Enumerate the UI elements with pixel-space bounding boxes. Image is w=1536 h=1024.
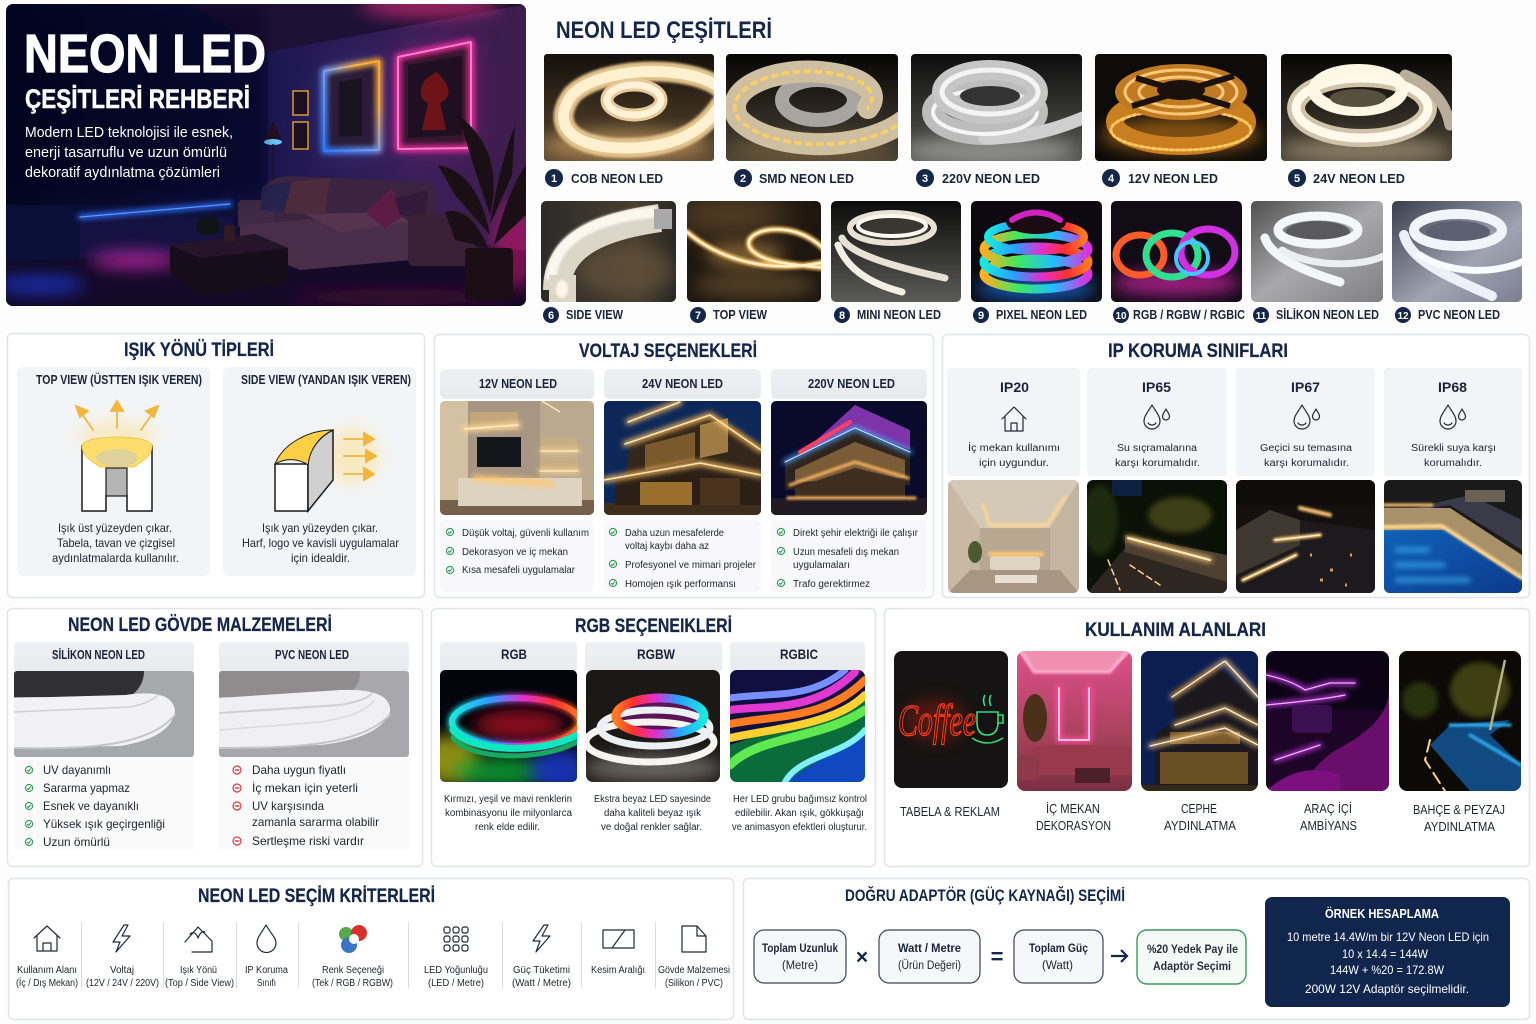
card: IP67: karşı korumalıdır. bbox=[1264, 458, 1349, 469]
hero description: Modern LED teknolojisi ile esnek, bbox=[25, 125, 233, 141]
photo: facade night bbox=[1141, 651, 1258, 791]
photo: facade with rgb neon bbox=[771, 401, 927, 515]
box: total length: Toplam Uzunluk bbox=[762, 943, 839, 955]
labels: row two: MINI NEON LED bbox=[857, 308, 941, 322]
card: top view: TOP VIEW (ÜSTTEN IŞIK VEREN) bbox=[36, 372, 202, 387]
description: rgb bbox=[444, 794, 572, 833]
criterion: usage area: (İç / Dış Mekan) bbox=[16, 976, 78, 989]
operator: times: × bbox=[856, 946, 868, 969]
labels: row two: PVC NEON LED bbox=[1418, 308, 1500, 322]
hero description bbox=[25, 125, 233, 181]
panel: selection criteria bbox=[8, 878, 734, 1020]
box: watt per metre bbox=[879, 930, 980, 983]
card: IP20 bbox=[947, 368, 1080, 476]
labels: row two bbox=[543, 307, 1500, 323]
section: neon led types bbox=[540, 17, 1530, 323]
criterion: voltage bbox=[86, 925, 159, 989]
list: 220V: Trafo gerektirmez bbox=[793, 579, 870, 590]
box: safety margin bbox=[1137, 930, 1246, 984]
coffee table bbox=[170, 217, 288, 297]
photo: SMD neon led bbox=[726, 54, 905, 162]
labels: row two: RGB / RGBW / RGBIC bbox=[1133, 308, 1245, 322]
criterion: ip class: IP Koruma bbox=[245, 965, 288, 976]
arrow bbox=[1111, 950, 1127, 962]
hero subtitle: ÇEŞİTLERİ REHBERİ bbox=[25, 84, 250, 114]
photo: 220V neon led bbox=[911, 54, 1082, 161]
photo: pink interior bbox=[1017, 651, 1132, 791]
card: side view bbox=[223, 367, 416, 576]
icon: side emitting profile bbox=[275, 430, 333, 511]
column headers bbox=[440, 369, 927, 399]
criterion: color: (Tek / RGB / RGBW) bbox=[312, 978, 393, 989]
panel: light direction types bbox=[8, 334, 424, 598]
photo: top view bbox=[687, 201, 821, 302]
photo: rgbw strip bbox=[583, 670, 723, 782]
card: IP20: için uygundur. bbox=[979, 458, 1049, 469]
description: için idealdir. bbox=[291, 551, 350, 565]
labels: row two: TOP VIEW bbox=[713, 308, 767, 322]
criterion: body material: Gövde Malzemesi bbox=[658, 965, 730, 976]
list: pvc cons: Sertleşme riski vardır bbox=[252, 834, 364, 848]
photo: rgb strip bbox=[440, 670, 577, 782]
list: 220V: uygulamaları bbox=[793, 560, 850, 571]
description: rgb: renk elde edilir. bbox=[475, 822, 540, 833]
heading: RGB SEÇENEIKLERİ bbox=[575, 616, 732, 637]
card: IP68: IP68 bbox=[1438, 379, 1467, 395]
card: IP67: IP67 bbox=[1291, 379, 1320, 395]
photo: stepping water bbox=[1236, 480, 1375, 593]
list: 24V: Daha uzun mesafelerde bbox=[625, 528, 724, 539]
card: IP65: IP65 bbox=[1142, 379, 1171, 395]
description bbox=[52, 521, 179, 565]
usage labels: AYDINLATMA bbox=[1164, 818, 1236, 833]
example calculation box: ÖRNEK HESAPLAMA bbox=[1325, 906, 1440, 921]
column headers: 220V NEON LED bbox=[808, 376, 895, 391]
card: IP68 bbox=[1384, 368, 1522, 476]
description: Işık yan yüzeyden çıkar. bbox=[262, 521, 378, 535]
criterion: usage area: Kullanım Alanı bbox=[17, 965, 77, 976]
card: IP67: Geçici su temasına bbox=[1260, 443, 1352, 454]
criterion: color bbox=[312, 925, 393, 989]
list: 24V: voltaj kaybı daha az bbox=[625, 541, 709, 552]
criterion: led density bbox=[424, 927, 488, 989]
example calculation box: 10 x 14.4 = 144W bbox=[1342, 947, 1429, 961]
heading: VOLTAJ SEÇENEKLERİ bbox=[579, 341, 757, 362]
photo: garden pool bbox=[1399, 651, 1521, 791]
list: 24V: Homojen ışık performansı bbox=[625, 579, 736, 590]
hero room illustration bbox=[0, 0, 537, 306]
hero description: enerji tasarruflu ve uzun ömürlü bbox=[25, 145, 227, 161]
description: rgbic: ve animasyon efektleri oluşturur. bbox=[732, 822, 867, 833]
panel: usage areas bbox=[884, 608, 1530, 866]
criterion: body material: (Silikon / PVC) bbox=[665, 978, 723, 989]
usage labels bbox=[900, 801, 1505, 834]
photo: garden planter bbox=[1082, 480, 1227, 593]
example calculation box bbox=[1265, 897, 1510, 1007]
box: total power: (Watt) bbox=[1042, 960, 1073, 972]
criterion: power use: (Watt / Metre) bbox=[512, 978, 571, 989]
criterion: voltage: Voltaj bbox=[110, 965, 134, 976]
criterion: led density: LED Yoğunluğu bbox=[424, 965, 488, 976]
usage labels: AMBİYANS bbox=[1300, 818, 1357, 833]
hero text dark overlay bbox=[6, 4, 264, 194]
column headers bbox=[14, 642, 409, 672]
labels: row one: SMD NEON LED bbox=[759, 171, 854, 186]
labels: row one: 2 bbox=[740, 173, 746, 185]
description: rgbic: edilebilir. Akan ışık, gökkuşağı bbox=[735, 808, 864, 819]
photo: rgb neon led bbox=[1111, 201, 1242, 302]
description: rgb: kombinasyonu ile milyonlarca bbox=[445, 808, 572, 819]
criterion: cut interval bbox=[591, 930, 645, 976]
card: IP20: IP20 bbox=[1000, 379, 1029, 395]
usage labels: TABELA & REKLAM bbox=[900, 804, 1000, 819]
labels: row one: 220V NEON LED bbox=[942, 171, 1040, 186]
arrows: sideways light bbox=[344, 433, 376, 480]
card: IP68: Sürekli suya karşı bbox=[1411, 443, 1496, 454]
neon frame: blue and amber bbox=[324, 61, 379, 151]
list: pvc cons: Daha uygun fiyatlı bbox=[252, 763, 346, 777]
panel: voltage options bbox=[434, 334, 934, 598]
description: Tabela, tavan ve çizgisel bbox=[57, 536, 175, 550]
description: Harf, logo ve kavisli uygulamalar bbox=[242, 536, 399, 550]
description: rgbic: Her LED grubu bağımsız kontrol bbox=[733, 794, 867, 805]
labels: row two: 11 bbox=[1256, 311, 1267, 322]
card: IP65: Su sıçramalarına bbox=[1117, 443, 1197, 454]
usage labels: BAHÇE & PEYZAJ bbox=[1413, 802, 1505, 817]
list: silicone pros: UV dayanımlı bbox=[43, 763, 111, 777]
photo: coffee sign: Coffee bbox=[898, 696, 976, 745]
photo: mini neon led bbox=[831, 201, 961, 302]
box: watt per metre: (Ürün Değeri) bbox=[898, 960, 961, 972]
panel: rgb options bbox=[420, 608, 876, 866]
photo: silicone neon led bbox=[1251, 201, 1390, 302]
list: silicone pros: Uzun ömürlü bbox=[43, 835, 110, 849]
heading: IŞIK YÖNÜ TİPLERİ bbox=[124, 340, 274, 361]
column headers: 24V NEON LED bbox=[642, 376, 723, 391]
box: safety margin: %20 Yedek Pay ile bbox=[1147, 944, 1238, 956]
labels: row two: SİLİKON NEON LED bbox=[1276, 307, 1379, 322]
criterion: light direction: (Top / Side View) bbox=[165, 978, 234, 989]
description bbox=[242, 521, 399, 565]
list: 24V: Profesyonel ve mimari projeler bbox=[625, 560, 757, 571]
list: pvc cons: İç mekan için yeterli bbox=[252, 781, 358, 795]
labels: row one: 24V NEON LED bbox=[1313, 171, 1405, 186]
box: watt per metre: Watt / Metre bbox=[898, 943, 961, 955]
card: top view bbox=[17, 367, 210, 576]
labels: row two: SIDE VIEW bbox=[566, 308, 623, 322]
box: safety margin: Adaptör Seçimi bbox=[1153, 961, 1231, 973]
panel: body materials bbox=[8, 608, 422, 866]
example calculation box: 200W 12V Adaptör seçilmelidir. bbox=[1305, 982, 1469, 996]
list: 12V bbox=[446, 528, 589, 576]
list: 12V: Kısa mesafeli uygulamalar bbox=[462, 565, 576, 576]
list: 12V: Dekorasyon ve iç mekan bbox=[462, 547, 568, 558]
heading: DOĞRU ADAPTÖR (GÜÇ KAYNAĞI) SEÇİMİ bbox=[845, 886, 1125, 905]
column headers: RGB bbox=[501, 646, 527, 662]
labels: row two: 7 bbox=[695, 310, 701, 322]
column headers: PVC NEON LED bbox=[275, 647, 349, 662]
icon: top emitting profile bbox=[82, 437, 152, 511]
photo: interior shelves bbox=[440, 401, 594, 515]
criterion: light direction bbox=[165, 927, 234, 989]
arrows: upward light bbox=[76, 401, 158, 430]
criterion: color: Renk Seçeneği bbox=[322, 965, 384, 976]
list: 220V bbox=[777, 528, 919, 590]
column headers: 12V NEON LED bbox=[479, 376, 557, 391]
box: total power: Toplam Güç bbox=[1029, 943, 1089, 955]
card: IP68: korumalıdır. bbox=[1424, 458, 1482, 469]
labels: row one: 12V NEON LED bbox=[1128, 171, 1218, 186]
list: 220V: Uzun mesafeli dış mekan bbox=[793, 547, 899, 558]
card: IP65: karşı korumalıdır. bbox=[1115, 458, 1200, 469]
heading: IP KORUMA SINIFLARI bbox=[1108, 341, 1288, 362]
photo: pool bbox=[1384, 480, 1522, 593]
list: 220V: Direkt şehir elektriği ile çalışır bbox=[793, 528, 919, 539]
hero description: dekoratif aydınlatma çözümleri bbox=[25, 165, 220, 181]
photo: pvc neon led bbox=[1392, 201, 1530, 302]
heading: KULLANIM ALANLARI bbox=[1085, 620, 1266, 641]
photo: silicone close-up bbox=[14, 671, 194, 757]
list: silicone pros: Esnek ve dayanıklı bbox=[43, 799, 139, 813]
photo: 24V neon led bbox=[1280, 54, 1452, 162]
card: IP67 bbox=[1236, 368, 1375, 476]
description: rgbw: Ekstra beyaz LED sayesinde bbox=[594, 794, 711, 805]
column headers: RGBIC bbox=[780, 646, 818, 662]
description: rgbw: daha kaliteli beyaz ışık bbox=[604, 808, 702, 819]
card: side view: SIDE VIEW (YANDAN IŞIK VEREN) bbox=[241, 372, 411, 387]
column headers: SİLİKON NEON LED bbox=[52, 647, 145, 662]
usage labels: AYDINLATMA bbox=[1424, 819, 1495, 834]
list: 24V bbox=[609, 528, 757, 590]
list: pvc cons bbox=[219, 757, 409, 849]
photo: pvc close-up bbox=[219, 671, 409, 757]
labels: row two: PIXEL NEON LED bbox=[996, 308, 1087, 322]
criterion: light direction: Işık Yönü bbox=[180, 965, 217, 976]
heading: NEON LED ÇEŞİTLERİ bbox=[556, 17, 772, 44]
labels: row two: 6 bbox=[548, 310, 554, 322]
description: rgbw bbox=[594, 794, 711, 833]
photo: coffee sign bbox=[894, 651, 1008, 788]
labels: row two: 9 bbox=[978, 310, 984, 322]
usage labels: CEPHE bbox=[1181, 801, 1217, 816]
labels: row one bbox=[545, 169, 1405, 187]
criterion: cut interval: Kesim Aralığı bbox=[591, 965, 645, 976]
photo: 12V neon led bbox=[1095, 54, 1267, 161]
labels: row one: 3 bbox=[922, 173, 928, 185]
criterion: ip class: Sınıfı bbox=[257, 978, 276, 989]
photo: car interior bbox=[1266, 651, 1389, 791]
card: IP65 bbox=[1087, 368, 1227, 476]
photo: bright interior bbox=[948, 480, 1079, 593]
list: pvc cons: zamanla sararma olabilir bbox=[252, 815, 379, 829]
labels: row one: 5 bbox=[1294, 173, 1300, 185]
sofa bbox=[238, 176, 476, 270]
box: total length: (Metre) bbox=[782, 960, 818, 972]
list: 12V: Düşük voltaj, güvenli kullanım bbox=[462, 528, 589, 539]
description: rgb: Kırmızı, yeşil ve mavi renklerin bbox=[444, 794, 572, 805]
list: silicone pros bbox=[14, 757, 194, 849]
box: total length bbox=[754, 930, 846, 983]
list backgrounds bbox=[440, 520, 927, 592]
criterion: ip class bbox=[245, 925, 288, 989]
criterion: power use: Güç Tüketimi bbox=[513, 965, 570, 976]
heading: NEON LED GÖVDE MALZEMELERİ bbox=[68, 615, 332, 636]
usage labels: İÇ MEKAN bbox=[1046, 801, 1100, 816]
list: silicone pros: Yüksek ışık geçirgenliği bbox=[43, 817, 165, 831]
labels: row one: COB NEON LED bbox=[571, 171, 663, 186]
description: rgbw: ve doğal renkler sağlar. bbox=[601, 822, 702, 833]
criterion: led density: (LED / Metre) bbox=[428, 978, 484, 989]
labels: row two: 8 bbox=[839, 310, 845, 322]
photo: two storey house bbox=[604, 401, 761, 515]
photo: pixel neon led bbox=[971, 201, 1102, 302]
card: IP20: İç mekan kullanımı bbox=[968, 441, 1060, 454]
panel: IP protection classes bbox=[942, 334, 1530, 598]
list: pvc cons: UV karşısında bbox=[252, 799, 324, 813]
labels: row two: 10 bbox=[1115, 311, 1127, 322]
usage labels: ARAÇ İÇİ bbox=[1304, 801, 1352, 816]
plant bbox=[438, 115, 526, 300]
heading: NEON LED SEÇİM KRİTERLERİ bbox=[198, 886, 435, 907]
criterion: body material bbox=[658, 926, 730, 989]
usage labels: DEKORASYON bbox=[1036, 818, 1111, 833]
description: rgbic bbox=[732, 794, 867, 833]
column headers bbox=[440, 642, 865, 672]
photo: rgbic strip bbox=[730, 670, 865, 782]
photo: side view bbox=[541, 201, 676, 302]
hero title: NEON LED bbox=[24, 24, 266, 84]
labels: row one: 1 bbox=[551, 173, 557, 185]
list: silicone pros: Sararma yapmaz bbox=[43, 781, 130, 795]
labels: row two: 12 bbox=[1397, 311, 1409, 322]
criterion: usage area bbox=[16, 926, 78, 989]
small amber frames bbox=[293, 91, 308, 149]
description: Işık üst yüzeyden çıkar. bbox=[58, 521, 172, 535]
floor lamp bbox=[264, 121, 282, 180]
example calculation box: 10 metre 14.4W/m bir 12V Neon LED için bbox=[1287, 930, 1489, 944]
panel: adapter selection bbox=[744, 878, 1530, 1020]
description: aydınlatmalarda kullanılır. bbox=[52, 551, 179, 565]
column headers: RGBW bbox=[637, 646, 676, 662]
labels: row one: 4 bbox=[1108, 173, 1115, 185]
criterion: power use bbox=[512, 925, 571, 989]
criterion: voltage: (12V / 24V / 220V) bbox=[86, 978, 159, 989]
neon frame: pink bbox=[398, 42, 471, 149]
operator: equals: = bbox=[991, 944, 1003, 969]
hero banner bbox=[0, 0, 537, 306]
photo: COB neon led bbox=[540, 54, 720, 161]
example calculation box: 144W + %20 = 172.8W bbox=[1330, 963, 1445, 977]
box: total power bbox=[1014, 930, 1103, 983]
